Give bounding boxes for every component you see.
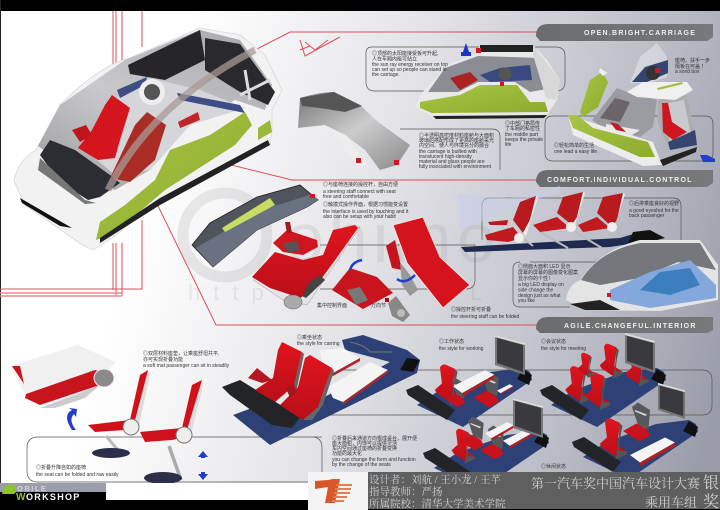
carriage shell illustration (298, 92, 410, 170)
annotations: agile changeful interior: the seat can be folded and raw easily (36, 472, 119, 478)
logo: FAW award (308, 472, 368, 510)
annotations: comfort individual control: ◎触摸式操作界面，根据习惯能变设置 (323, 201, 408, 208)
annotations: agile changeful interior: the style for meeting (541, 346, 586, 352)
row of three seats (457, 186, 665, 252)
carrying style platform (222, 335, 420, 445)
watermark: ohimo (285, 199, 501, 277)
annotations: comfort individual control: ◎与座椅连接的操控杆，自由方便 (323, 181, 398, 188)
annotations: comfort individual control (317, 181, 679, 320)
annotations: agile changeful interior: a soft mat passenger can sit in steadily (143, 363, 230, 369)
annotations: agile changeful interior: the style for working (439, 346, 484, 352)
logo: mobile workshop (2, 484, 81, 503)
working style platform (406, 335, 532, 427)
watermark: http (188, 280, 277, 305)
car open door view (568, 43, 697, 166)
annotations: agile changeful interior: ◎会议状态 (541, 338, 566, 345)
icon: blue right arrow (700, 155, 715, 162)
annotations: agile changeful interior: the style for carring (297, 341, 340, 347)
annotations: agile changeful interior: you can change the form and function (332, 457, 416, 463)
large seat (386, 217, 470, 308)
annotations: open bright carriage: 隔板在可盖 ！ (675, 63, 706, 70)
annotations: open bright carriage: can set up so people can stand in (372, 67, 447, 73)
section tab: open bright carriage: OPEN.BRIGHT.CARRIAGE (584, 30, 696, 37)
logo: mobile workshop: OBILE (17, 484, 47, 493)
annotations: comfort individual control: 集中控制界面 (317, 302, 347, 309)
credits panel: 银 (703, 474, 719, 492)
annotations: open bright carriage: the carriage. (372, 72, 400, 78)
annotations: agile changeful interior: 功能的最大化 (332, 450, 362, 457)
annotations: comfort individual control: a big LED display on (518, 282, 564, 288)
annotations: open bright carriage: material and glass people are (419, 159, 485, 165)
main car illustration (14, 28, 282, 250)
icon: blue up arrow (461, 43, 471, 56)
annotations: comfort individual control: the steering staff can be folded (451, 314, 520, 320)
annotations: agile changeful interior: ◎休闲状态 (541, 463, 566, 470)
section tab: agile changeful interior (536, 317, 713, 333)
annotations: agile changeful interior: ◎乘坐状态 (297, 334, 322, 341)
icon: blue curved arrow (67, 408, 77, 430)
icon: rotation arrows (350, 260, 415, 281)
car with LED side display (566, 240, 718, 311)
annotations: comfort individual control: ◎侧面大面积 LED 显示 (518, 263, 571, 270)
steering panel (192, 185, 318, 267)
annotations: open bright carriage: the carriage is builted with (419, 149, 477, 155)
meeting style platform (540, 333, 666, 427)
annotations: comfort individual control: 显示你的个性！ (518, 275, 553, 282)
annotations: open bright carriage: fully insociated with environment (419, 164, 492, 170)
annotations: open bright carriage: the sun ray energy receiver on top (372, 62, 448, 68)
annotations: open bright carriage: a sond box (675, 69, 700, 75)
annotations: open bright carriage: 玻璃的搭配形成了更高的座舱采光 (419, 137, 494, 144)
credits panel: 设计者：刘航 / 王小龙 / 王芊 (369, 473, 501, 486)
annotations: open bright carriage: ◎顶部的太阳能接受板可升起, (372, 50, 438, 57)
annotations: comfort individual control: a steering staff connect with seat (323, 189, 396, 195)
icon: blue up and down arrows (198, 451, 208, 480)
annotations: open bright carriage: life (505, 142, 512, 148)
annotations: open bright carriage: one lead a easy life (554, 149, 597, 155)
fourth style platform (423, 398, 549, 490)
annotations: agile changeful interior: ◎折叠后来通道方向根成桌台，展开便 (332, 435, 417, 442)
annotations: comfort individual control: you like (518, 298, 535, 304)
watermark: L (470, 280, 482, 305)
annotations: comfort individual control: also can be setup with your habit (323, 214, 396, 220)
annotations: comfort individual control: design just as what (518, 293, 561, 299)
credits panel: 指导教师：严扬 (369, 485, 443, 498)
annotations: open bright carriage: ◎轻松简单的生活 (554, 142, 594, 149)
credits panel: 所属院校：清华大学美术学院 (369, 497, 506, 510)
annotations: open bright carriage (372, 50, 710, 170)
logo: mobile workshop: ORKSHOP (26, 492, 81, 502)
seat table illustration (10, 345, 116, 408)
annotations: agile changeful interior (36, 334, 586, 478)
annotations: comfort individual control: back passenger (629, 213, 665, 219)
credits panel (368, 472, 720, 510)
annotations: comfort individual control: side change the (518, 288, 554, 294)
seat control console (332, 268, 410, 322)
annotations: open bright carriage: ◎半透明高密度材料座舱与大面积 (419, 132, 494, 139)
annotations: comfort individual control: ◎操控杆折可折叠 (451, 306, 491, 313)
annotations: open bright carriage: ◎中部门格局传 (505, 120, 540, 127)
annotations: open bright carriage: 了车厢的私密性 (505, 125, 540, 132)
car side view: sun roof raised (415, 45, 560, 119)
credits panel: 乘用车组 (645, 495, 697, 510)
annotations: agile changeful interior: ◎工作状态 (439, 338, 464, 345)
annotations: open bright carriage: 人在车厢内能可站立 (372, 56, 417, 62)
annotations: open bright carriage: keeps the private (505, 137, 543, 143)
annotations: open bright carriage: the middle part (505, 132, 539, 138)
two folding seats (88, 370, 203, 484)
annotations: agile changeful interior: ◎折叠升降自如的座椅 (36, 464, 86, 471)
section tab: comfort individual control: COMFORT.INDIVIDUAL.CONTROL (547, 177, 693, 184)
section tab: agile changeful interior: AGILE.CHANGEFUL.INTERIOR (564, 323, 697, 330)
annotations: comfort individual control: the interface is used by touching and it (323, 209, 409, 215)
annotations: agile changeful interior: by the change of the seats (332, 462, 391, 468)
footer band left (0, 483, 106, 492)
top black band (0, 0, 720, 11)
annotations: comfort individual control: a good eyeshot for the (629, 208, 679, 214)
annotations: open bright carriage: translucent high-density (419, 154, 472, 160)
section tab: comfort individual control (536, 170, 713, 187)
annotations: open bright carriage: 内空间、使人与环境充分的融合 (419, 142, 489, 149)
logo: mobile workshop: W (16, 492, 26, 503)
annotations: comfort individual control: 万向节 (371, 302, 386, 309)
annotations: comfort individual control: 屏幕的屏幕的图像变化图案 (518, 269, 578, 276)
annotations: agile changeful interior: 座大面积，内饰可以提供灵活 (332, 440, 397, 447)
leisure style platform (572, 383, 698, 479)
annotations: open bright carriage: 座椅、扶手一步 (675, 57, 710, 64)
annotations: agile changeful interior: 亦可实现折叠功能 (143, 356, 183, 363)
credits panel: 第一汽车奖中国汽车设计大赛 (531, 476, 700, 491)
section tab: open bright carriage (536, 24, 713, 41)
annotations: agile changeful interior: ◎双层材料座垫，让乘座舒坦共平, (143, 350, 219, 357)
red guide lines (0, 11, 537, 325)
annotations: comfort individual control: ◎后排乘座良好的视野 (629, 200, 679, 207)
folding seat with keypad (252, 222, 360, 309)
watermark (183, 193, 501, 305)
annotations: agile changeful interior: 车内空间通过座椅的折叠变换 (332, 445, 397, 452)
annotations: comfort individual control: free and comfortable (323, 194, 369, 200)
